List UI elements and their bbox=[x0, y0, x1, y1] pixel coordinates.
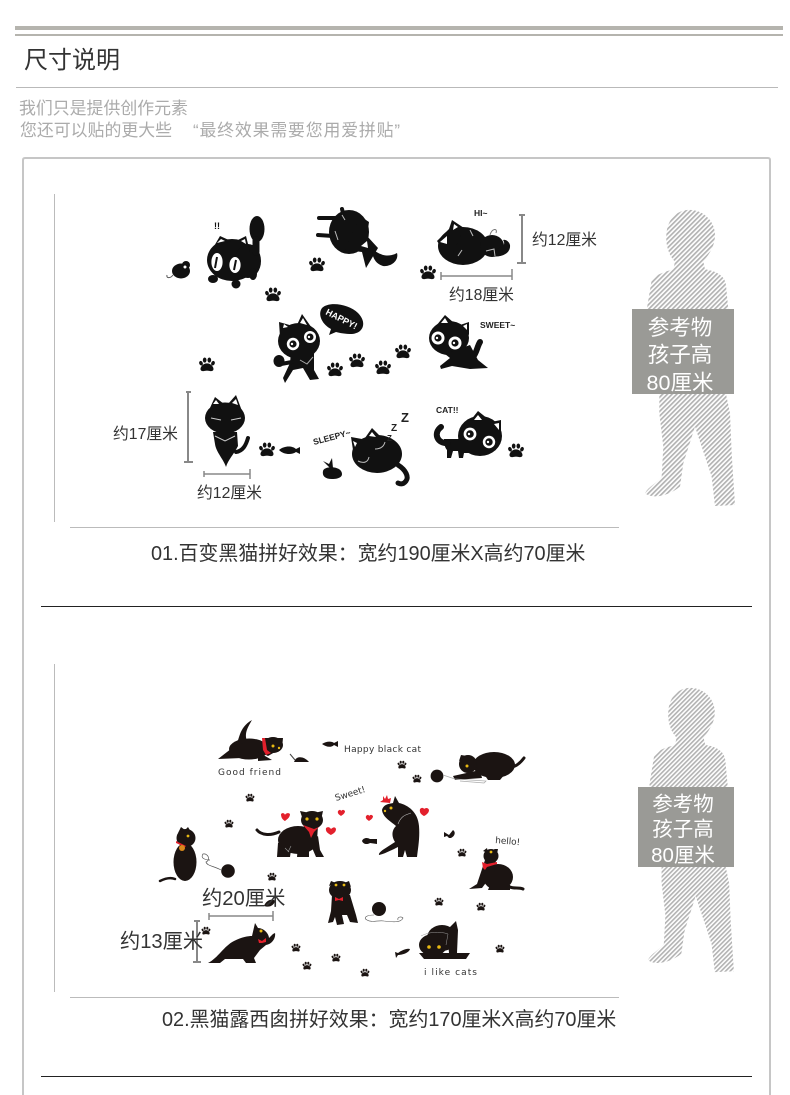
reference label 1: 80厘米 bbox=[647, 371, 713, 395]
icon: butterfly bbox=[444, 830, 455, 838]
reference label 1 bbox=[632, 309, 734, 395]
dimension: 13cm high bbox=[120, 921, 203, 962]
child silhouette 2 bbox=[648, 688, 734, 972]
cat: startled with fluffy tail bbox=[207, 216, 264, 288]
text: z z z: Z bbox=[387, 434, 392, 443]
cat: hello sitting bbox=[469, 836, 523, 890]
paw prints section 2 bbox=[201, 761, 505, 976]
intro text: 我们只是提供创作元素 bbox=[19, 99, 188, 118]
dimension: 12cm wide: 约12厘米 bbox=[197, 484, 262, 502]
section 2 frame lines bbox=[54, 664, 619, 998]
header double rule bbox=[15, 26, 783, 88]
child silhouette 1 bbox=[645, 210, 735, 506]
cat: hello sitting: hello! bbox=[495, 836, 521, 848]
section 1 caption: 01.百变黑猫拼好效果：宽约190厘米X高约70厘米 bbox=[151, 542, 585, 565]
cat: front facing with bow bbox=[328, 881, 358, 925]
reference label 1: 参考物 bbox=[648, 316, 712, 340]
dimension: 17cm high: 约17厘米 bbox=[113, 425, 178, 443]
dimension: 12cm wide bbox=[197, 469, 262, 502]
cat: startled with fluffy tail: !! bbox=[214, 221, 220, 231]
hearts bbox=[281, 808, 429, 835]
text: z z z: Z bbox=[391, 423, 397, 434]
text: z z z bbox=[387, 410, 409, 443]
speech bubble: happy bbox=[320, 304, 363, 335]
dimension: 17cm high bbox=[113, 391, 193, 462]
reference label 2: 孩子高 bbox=[652, 818, 714, 841]
cat: good friend prowling: Good friend bbox=[218, 768, 281, 778]
cat: lying hi bbox=[437, 208, 510, 265]
section 1 frame lines bbox=[54, 194, 619, 528]
cat: in box bbox=[419, 921, 470, 959]
icon: fish bbox=[279, 446, 300, 454]
text: happy black cat: Happy black cat bbox=[344, 745, 421, 755]
cat: red ribbon standing bbox=[257, 811, 324, 857]
dimension: 20cm wide: 约20厘米 bbox=[202, 887, 285, 910]
intro text: 您还可以贴的更大些 bbox=[20, 121, 172, 140]
cat: happy walking bbox=[274, 314, 320, 383]
icon: small mouse and fish bbox=[290, 741, 338, 762]
dimension: 12cm high: 约12厘米 bbox=[532, 231, 597, 249]
cat: sweet lying: SWEET~ bbox=[480, 320, 515, 330]
reference label 2 bbox=[638, 787, 734, 867]
section 2 caption: 02.黑猫露西囱拼好效果：宽约170厘米X高约70厘米 bbox=[162, 1008, 616, 1031]
section 1 divider bbox=[41, 606, 752, 607]
cat: cat!! with big eyes: CAT!! bbox=[436, 405, 459, 415]
paw prints section 1 bbox=[198, 257, 525, 457]
cat: lying hi: HI~ bbox=[474, 208, 488, 218]
dark mouse under label bbox=[264, 900, 275, 907]
cat: crown upright bbox=[379, 795, 419, 857]
intro text bbox=[19, 99, 400, 140]
reference label 1: 孩子高 bbox=[648, 343, 712, 367]
cat: sitting left with bell bbox=[160, 827, 196, 881]
dimension: 18cm wide bbox=[441, 269, 514, 304]
intro text: “最终效果需要您用爱拼贴” bbox=[193, 121, 400, 140]
cat: kitten pawing bbox=[208, 923, 275, 963]
dimension: 12cm high bbox=[517, 215, 597, 263]
text: sweet: Sweet! bbox=[334, 785, 367, 804]
speech bubble: happy: HAPPY! bbox=[324, 307, 359, 331]
dimension: 18cm wide: 约18厘米 bbox=[449, 286, 514, 304]
icon: food bowl bbox=[323, 458, 342, 479]
text: sleepy: SLEEPY~ bbox=[312, 427, 352, 447]
cat: sweet lying bbox=[429, 315, 515, 369]
text: z z z: Z bbox=[401, 410, 409, 425]
icon: yarn ball with thread bbox=[202, 854, 235, 878]
icon: yarn ball 2 bbox=[365, 902, 403, 922]
cat: good friend prowling bbox=[218, 720, 283, 778]
icon: mouse bbox=[167, 261, 190, 278]
cat: cat!! with big eyes bbox=[436, 405, 502, 458]
cat: eyes closed standing bbox=[205, 395, 248, 467]
cat: sleeping bbox=[351, 428, 407, 484]
section 2 divider bbox=[41, 1076, 752, 1077]
dimension: 13cm high: 约13厘米 bbox=[120, 930, 203, 953]
cat: playing with yarn bbox=[431, 752, 524, 783]
icon: fish near box bbox=[395, 949, 410, 958]
text: i like cats: i like cats bbox=[424, 968, 477, 978]
icon: fish bone bbox=[362, 838, 377, 844]
reference label 2: 参考物 bbox=[652, 793, 714, 816]
dimension: 20cm wide bbox=[202, 887, 285, 921]
reference label 2: 80厘米 bbox=[651, 844, 715, 867]
title: 尺寸说明 bbox=[24, 47, 120, 74]
cat: rolling on back bbox=[318, 209, 397, 268]
